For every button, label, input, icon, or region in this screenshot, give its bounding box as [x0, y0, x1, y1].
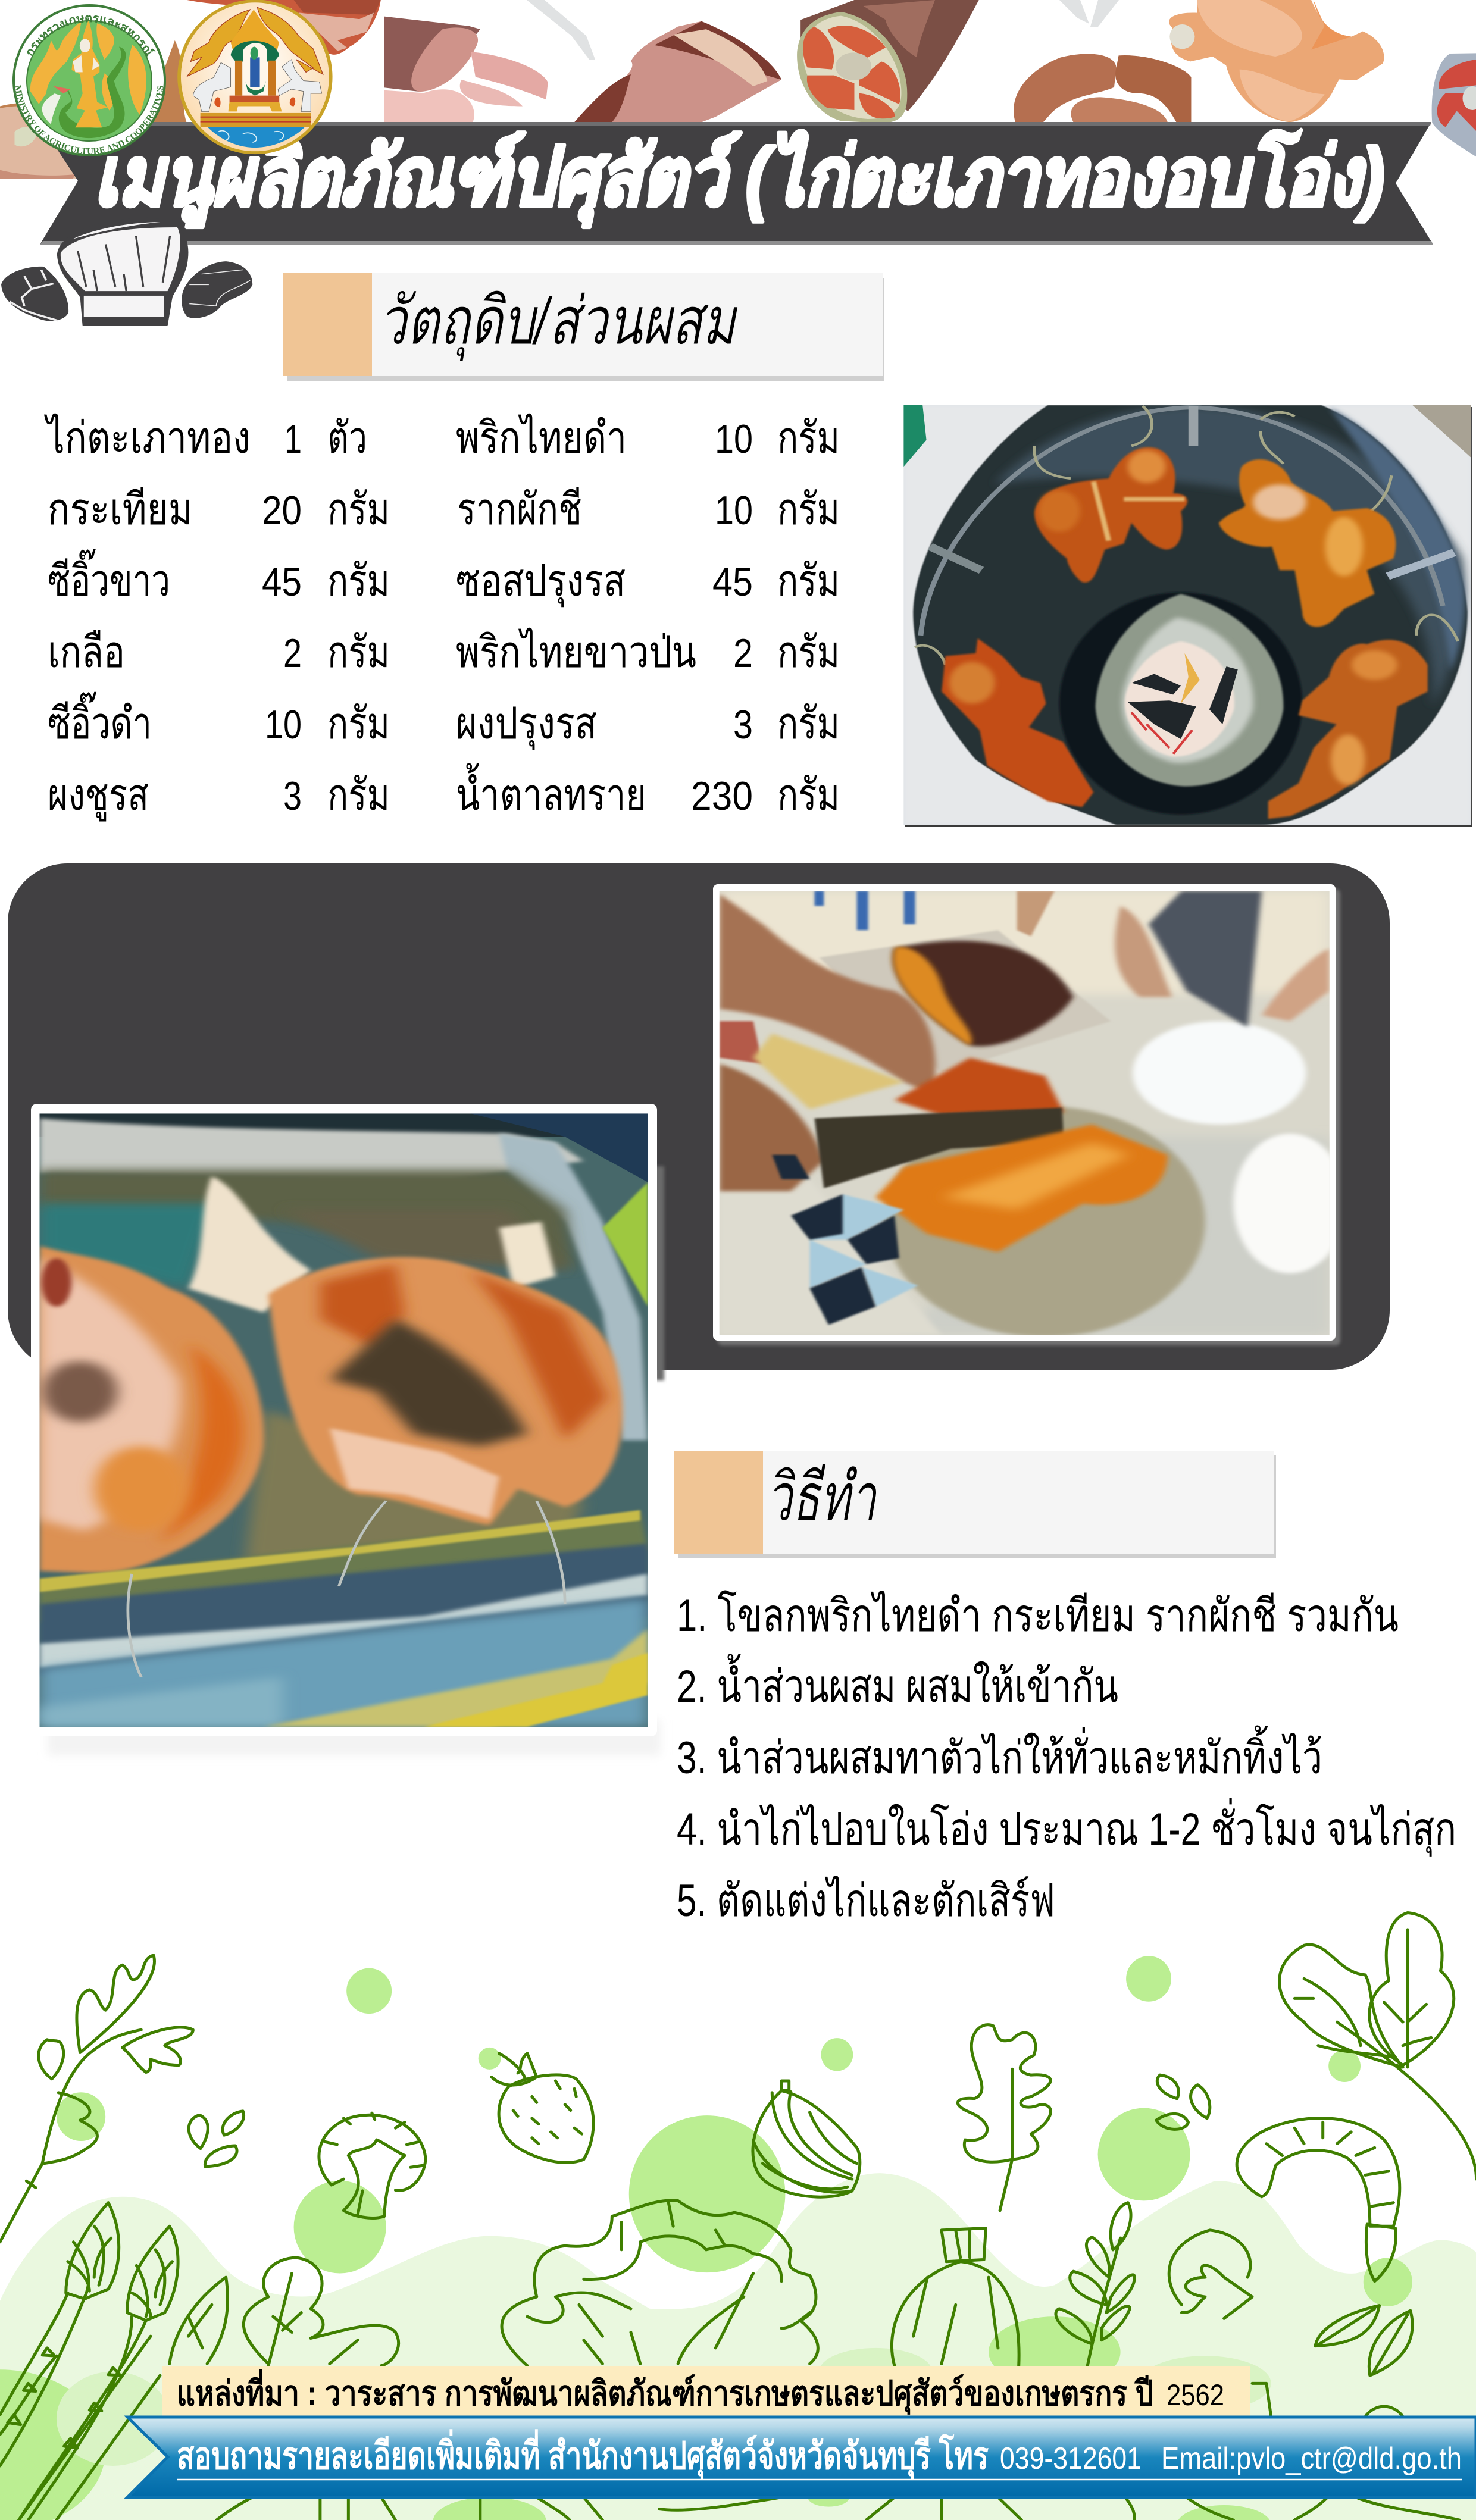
photo: roasted chickens on a tray [31, 1104, 664, 1755]
quantities, second column: 45 [712, 559, 753, 605]
chef hat with steaks icon [1, 218, 252, 326]
herb top left [0, 1955, 193, 2242]
quantities, first column [262, 417, 302, 819]
quantities, second column: 10 [715, 488, 753, 533]
ingredient names, first column: ผงชูรส [48, 770, 149, 822]
leaf cluster [243, 2258, 399, 2366]
ingredient names, second column [456, 413, 696, 819]
units, first column: กรัม [327, 770, 390, 819]
units, second column [777, 413, 840, 819]
ingredient names, first column: ซีอิ๊วดำ [48, 691, 152, 748]
meat: red steak top [187, 0, 381, 55]
method steps: 5. ตัดแต่งไก่และตักเสิร์ฟ [677, 1875, 1055, 1926]
spinach top right [1280, 1913, 1476, 2179]
lettuce [502, 2200, 818, 2366]
quantities, first column: 45 [262, 559, 302, 605]
units, second column: กรัม [777, 484, 840, 534]
ingredient names, first column: เกลือ [48, 627, 125, 677]
ingredient names, first column: กระเทียม [48, 484, 193, 534]
units, second column: กรัม [777, 627, 840, 677]
contact ribbon: สอบถามรายละเอียดเพิ่มเติมที่ สำนักงานปศุสัตว์จังหวัดจันทบุรี โทร [177, 2429, 989, 2480]
source note strip [162, 2366, 1250, 2418]
contact ribbon [127, 2417, 1476, 2497]
meat: sausage slices [384, 17, 548, 122]
units, first column: ตัว [327, 413, 367, 462]
quantities, second column [691, 417, 753, 819]
quantities, first column: 3 [283, 774, 302, 819]
mushroom [319, 2113, 426, 2218]
right steak [182, 261, 252, 318]
contact ribbon: 039-312601 [1000, 2441, 1142, 2476]
onion [753, 2081, 860, 2197]
title banner [39, 122, 1433, 245]
units, first column: กรัม [327, 627, 390, 677]
units, first column: กรัม [327, 556, 390, 605]
left chicken [39, 1246, 264, 1574]
squash [892, 2228, 1019, 2366]
chicken top right [1219, 459, 1396, 627]
ingredient names, first column: ซีอิ๊วขาว [48, 549, 170, 605]
meat: chicken leg [1169, 0, 1384, 122]
quantities, first column: 10 [265, 702, 302, 747]
rosemary sprig [1056, 2203, 1134, 2366]
quantities, first column: 2 [283, 631, 302, 676]
method steps: 3. นำส่วนผสมทาตัวไก่ให้ทั่วและหมักทิ้งไว้ [677, 1725, 1322, 1783]
heading: method: วิธีทำ [767, 1460, 877, 1535]
stems below banner [0, 2336, 1459, 2520]
pale necks [188, 1176, 311, 1313]
seal ring text: MINISTRY OF AGRICULTURE AND COOPERATIVES [15, 84, 163, 154]
vegetable illustration background [0, 1913, 1476, 2520]
strawberry [492, 2053, 593, 2162]
quantities, second column: 2 [733, 631, 753, 676]
quantities, second column: 230 [691, 774, 753, 819]
logo: livestock department seal [179, 1, 331, 153]
quantities, first column: 20 [262, 488, 302, 533]
units, first column: กรัม [327, 699, 390, 748]
oak leaf [958, 2025, 1050, 2211]
photo: cutting the chicken [713, 884, 1346, 1345]
units, first column: กรัม [327, 484, 390, 534]
source note strip: แหล่งที่มา : วาระสาร การพัฒนาผลิตภัณฑ์การเกษตรและปศุสัตว์ของเกษตรกร ปี [177, 2369, 1153, 2415]
ingredients list [44, 413, 840, 822]
method steps: 2. น้ำส่วนผสม ผสมให้เข้ากัน [677, 1654, 1118, 1712]
source note strip: 2562 [1167, 2378, 1224, 2412]
heading: ingredients [283, 273, 884, 381]
meat: sliced steak joint [797, 0, 979, 123]
seal artwork [30, 20, 146, 138]
heading: ingredients: วัตถุดิบ/ส่วนผสม [379, 284, 738, 362]
ingredient names, second column: น้ำตาลทราย [456, 763, 646, 819]
header meat illustrations [0, 0, 1476, 179]
units, second column: กรัม [777, 556, 840, 605]
ingredient names, second column: ผงปรุงรส [456, 699, 597, 750]
seal ring text [15, 15, 163, 154]
quantities, second column: 10 [715, 417, 753, 462]
meat: left roast behind logos [0, 40, 187, 179]
chicken bottom left [942, 638, 1093, 807]
centre chicken [268, 1257, 623, 1525]
logo: ministry of agriculture seal [12, 4, 166, 156]
ingredient names, second column: รากผักชี [457, 484, 582, 534]
left steak [1, 267, 68, 321]
green dots [0, 1956, 1412, 2520]
ingredient names, second column: พริกไทยดำ [456, 413, 627, 462]
method steps [677, 1590, 1456, 1926]
units, first column [327, 413, 390, 819]
chicken bottom right [1268, 640, 1428, 819]
line art vegetables [0, 1913, 1476, 2520]
units, second column: กรัม [777, 770, 840, 819]
meat: ham joint [574, 21, 781, 122]
two leaves right [1315, 2306, 1412, 2375]
hat [57, 218, 188, 326]
grey utensil marks [527, 0, 1119, 60]
dark panel [8, 863, 1390, 1370]
meat: sausage ring [1014, 54, 1191, 123]
photo: chickens in clay oven [903, 405, 1472, 827]
quantities, second column: 3 [733, 702, 753, 747]
small leaves [189, 2111, 244, 2167]
tray front [39, 1513, 648, 1623]
units, second column: กรัม [777, 699, 840, 748]
units, second column: กรัม [777, 413, 840, 462]
ingredient names, first column [44, 413, 251, 822]
chicken top left [1034, 447, 1187, 583]
meat: right edge steak [1432, 53, 1476, 156]
ingredient names, second column: ซอสปรุงรส [456, 556, 626, 608]
heading: method [674, 1451, 1276, 1558]
three seeds [1156, 2075, 1210, 2129]
seal ring text: กระทรวงเกษตรและสหกรณ์ [27, 15, 156, 57]
asparagus left [0, 2203, 228, 2520]
quantities, first column: 1 [284, 417, 302, 462]
ingredient names, second column: พริกไทยขาวป่น [456, 627, 696, 677]
pale green hills [0, 2173, 1476, 2520]
small mushroom [1169, 2230, 1252, 2318]
shrimp [1237, 2118, 1400, 2281]
ingredient names, first column: ไก่ตะเภาทอง [44, 413, 251, 462]
